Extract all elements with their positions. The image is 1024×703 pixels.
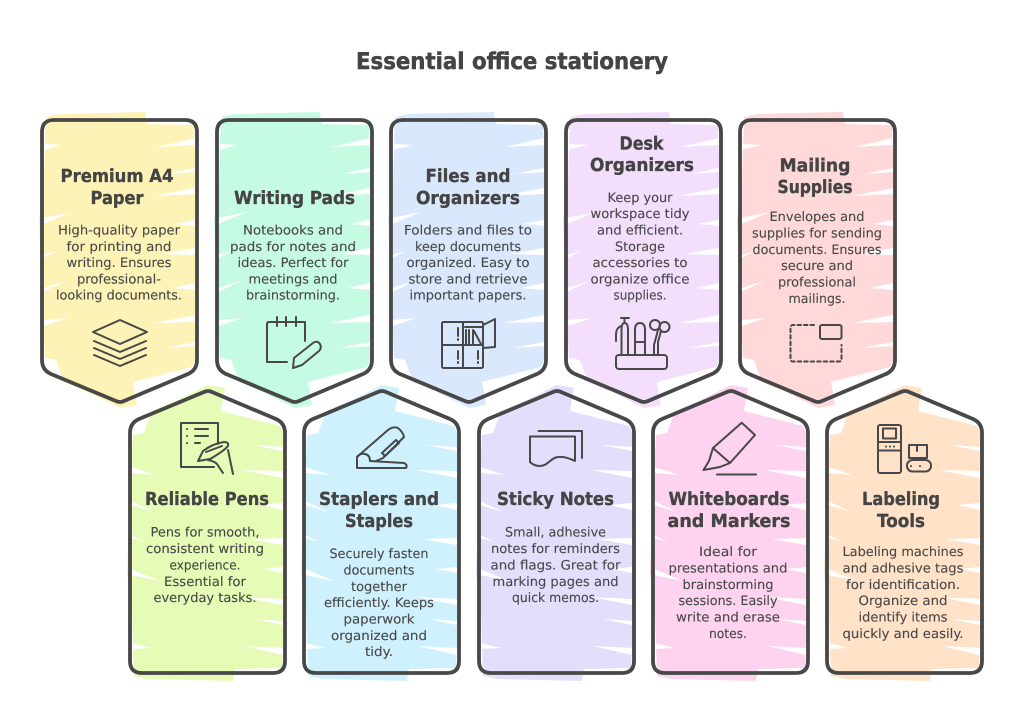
panel: Writing Pads <box>214 112 373 408</box>
icon: envelope <box>790 325 842 362</box>
heading: Paper <box>90 188 144 209</box>
description: documents. Ensures <box>752 243 882 258</box>
panel outline <box>479 391 634 673</box>
description: Securely fasten <box>330 547 428 562</box>
panel fill: pink <box>650 385 809 681</box>
heading: Premium A4 <box>60 166 174 187</box>
description: experience. <box>170 558 240 574</box>
description <box>490 526 621 606</box>
description: tidy. <box>365 645 393 660</box>
description: Small, adhesive <box>505 526 606 540</box>
heading: Supplies <box>778 177 852 198</box>
icon: labeling machine <box>878 425 931 473</box>
description: High-quality paper <box>58 224 181 238</box>
description: and adhesive tags <box>842 562 964 576</box>
heading: Tools <box>877 511 925 532</box>
panel outline <box>827 391 982 673</box>
description: ideas. Perfect for <box>238 256 349 271</box>
description: Ideal for <box>699 545 758 560</box>
description: writing. Ensures <box>66 256 172 271</box>
description: Keep your <box>608 191 673 206</box>
description: for printing and <box>66 240 172 255</box>
icon: writing hand <box>181 423 233 474</box>
panel: Whiteboards and Markers <box>650 385 809 681</box>
icon: notepad and pencil <box>267 317 321 368</box>
panel outline <box>566 120 721 402</box>
icon: desk organizer <box>616 318 670 369</box>
description: Storage <box>615 240 665 255</box>
panel outline <box>130 391 285 673</box>
panel fill: yellow <box>39 112 198 408</box>
heading <box>60 166 174 209</box>
description: together <box>351 580 408 595</box>
description <box>230 224 356 304</box>
description <box>324 547 434 660</box>
panel outline <box>653 391 808 673</box>
panel fill: mint <box>214 112 373 408</box>
panel: Sticky Notes <box>476 385 635 681</box>
panel outline <box>42 120 197 402</box>
description: paperwork <box>344 612 415 628</box>
description: notes for reminders <box>491 542 620 557</box>
panel outline <box>740 120 895 402</box>
description: mailings. <box>788 292 846 307</box>
description <box>56 224 182 304</box>
heading: Sticky Notes <box>497 489 614 510</box>
heading: Organizers <box>416 188 520 209</box>
description: workspace tidy <box>590 207 690 222</box>
description: meetings and <box>248 272 338 288</box>
description: sessions. Easily <box>678 594 778 609</box>
heading: and Markers <box>668 511 790 532</box>
description: organize office <box>590 272 690 288</box>
description: supplies for sending <box>752 226 882 242</box>
description: accessories to <box>592 256 688 271</box>
heading <box>590 134 694 176</box>
heading <box>668 489 790 532</box>
panel: Desk Organizers <box>563 112 722 408</box>
panel: Files and Organizers <box>388 112 547 408</box>
description: documents <box>344 564 415 578</box>
icon: highlighter marker <box>704 423 756 474</box>
description: looking documents. <box>56 288 182 304</box>
description: important papers. <box>410 288 526 304</box>
description: identify items <box>858 610 948 626</box>
description <box>668 545 788 642</box>
description: for identification. <box>846 578 960 593</box>
description: and efficient. <box>597 224 683 238</box>
description: write and erase <box>676 610 780 626</box>
description: and flags. Great for <box>490 558 621 574</box>
heading: Writing Pads <box>234 188 355 209</box>
description: brainstorming <box>682 578 774 593</box>
description: everyday tasks. <box>154 591 256 606</box>
panel fill: peach <box>824 385 983 681</box>
panel: Staplers and Staples <box>301 385 460 681</box>
heading: Staplers and <box>319 489 439 510</box>
panel fill: lime <box>127 385 286 681</box>
description: marking pages and <box>492 575 618 590</box>
description: Organize and <box>858 594 948 609</box>
description: quickly and easily. <box>842 627 964 642</box>
panel: Reliable Pens <box>127 385 286 681</box>
panel fill: lavender <box>476 385 635 681</box>
description <box>404 224 532 304</box>
description: Pens for smooth, <box>150 526 260 540</box>
description: notes. <box>709 627 747 642</box>
heading: Whiteboards <box>668 489 790 510</box>
description: consistent writing <box>146 542 264 557</box>
description: secure and <box>781 259 853 274</box>
heading <box>319 489 439 532</box>
panel fill: blue <box>388 112 547 408</box>
heading <box>416 166 520 209</box>
icon: stapler <box>357 427 407 468</box>
description: presentations and <box>668 562 788 576</box>
panel outline <box>217 120 372 402</box>
description: supplies. <box>614 288 666 304</box>
heading: Labeling <box>862 489 940 510</box>
description: Essential for <box>164 575 247 590</box>
description <box>590 191 690 304</box>
panel outline <box>304 391 459 673</box>
panel fill: sky <box>301 385 460 681</box>
description: organized. Easy to <box>406 256 530 271</box>
heading <box>862 489 940 532</box>
heading: Desk <box>620 134 664 154</box>
icon: filing cabinet <box>442 319 495 368</box>
description: Envelopes and <box>770 210 864 225</box>
description: organized and <box>331 629 427 644</box>
panel fill: rose <box>737 112 896 408</box>
heading: Reliable Pens <box>145 489 269 510</box>
description <box>146 526 264 606</box>
panel fill: purple <box>563 112 722 408</box>
description: pads for notes and <box>230 240 356 255</box>
description: store and retrieve <box>408 272 528 288</box>
heading <box>778 156 852 198</box>
heading: Files and <box>426 166 510 187</box>
description: Labeling machines <box>842 545 964 560</box>
heading: Mailing <box>780 156 850 176</box>
title: Essential office stationery <box>356 49 668 75</box>
description: quick memos. <box>512 591 599 606</box>
description: efficiently. Keeps <box>324 596 434 611</box>
description: Folders and files to <box>404 224 532 238</box>
description <box>842 545 964 642</box>
panel outline <box>391 120 546 402</box>
panel: Labeling Tools <box>824 385 983 681</box>
description: brainstorming. <box>246 288 340 304</box>
panel: Premium A4 Paper <box>39 112 198 408</box>
description <box>752 210 882 307</box>
heading: Organizers <box>590 155 694 176</box>
icon: sticky notes <box>530 431 582 466</box>
icon: paper stack <box>93 320 147 366</box>
description: professional <box>778 276 856 290</box>
heading: Staples <box>345 511 413 532</box>
description: keep documents <box>415 240 521 255</box>
description: Notebooks and <box>243 224 343 238</box>
panel: Mailing Supplies <box>737 112 896 408</box>
description: professional- <box>77 272 161 288</box>
